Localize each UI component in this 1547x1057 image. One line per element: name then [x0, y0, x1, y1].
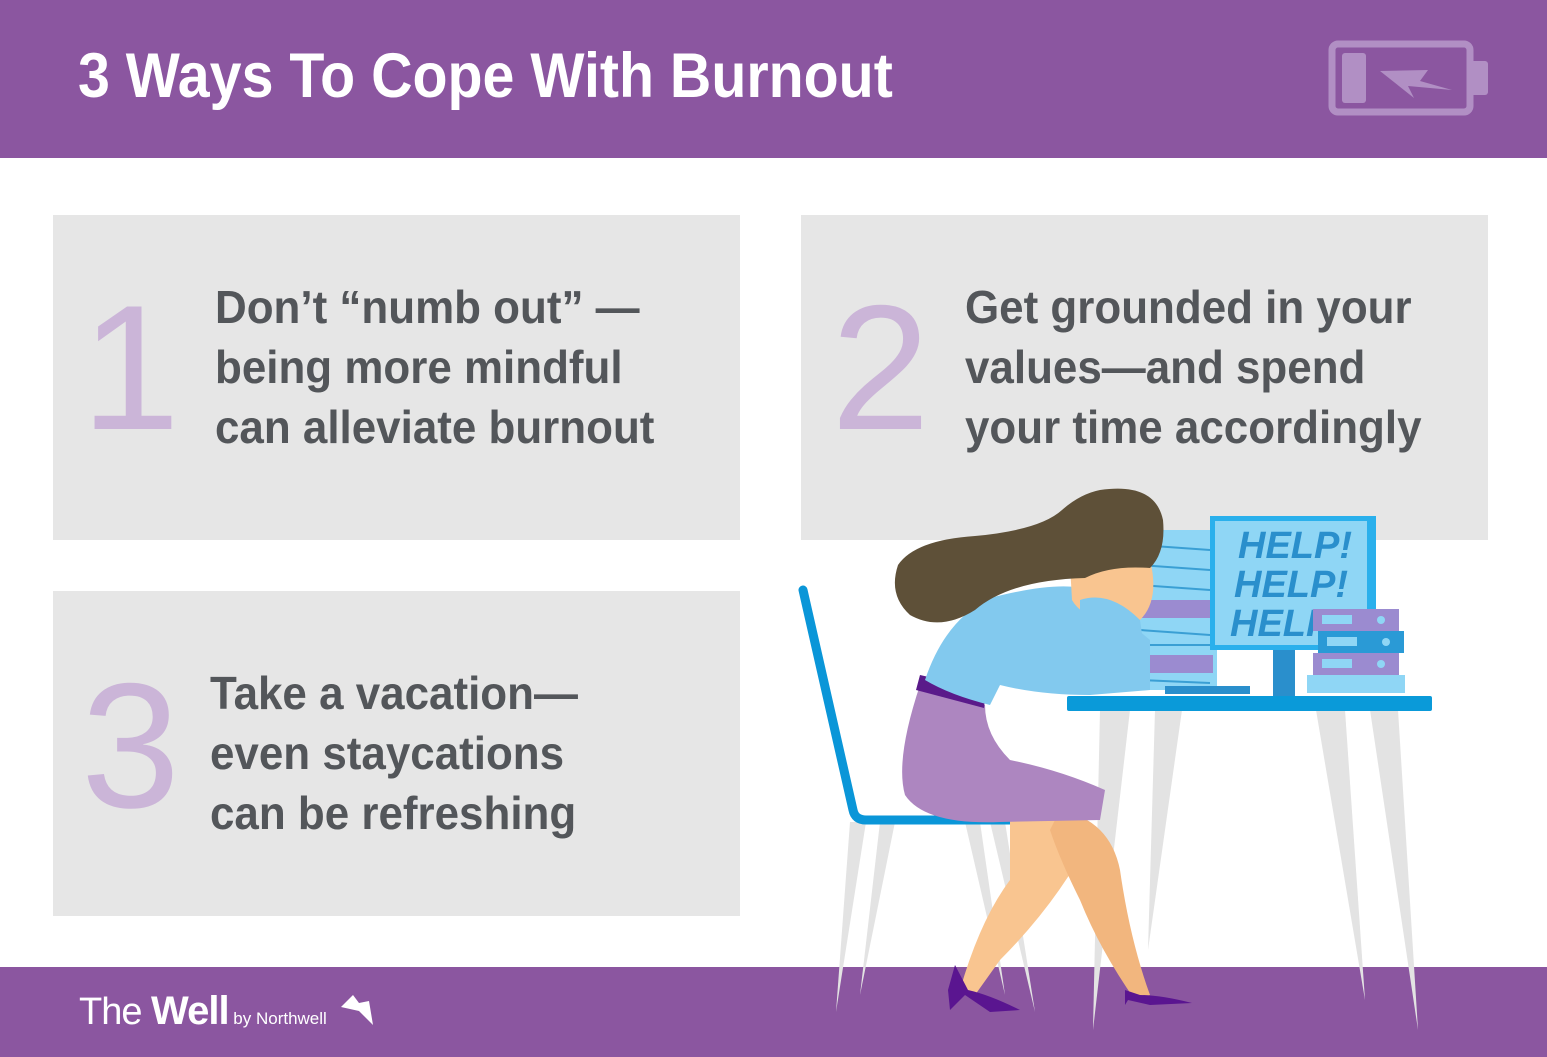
- monitor with HELP text: [1165, 516, 1376, 696]
- panel: step 1: [53, 215, 740, 540]
- monitor with HELP text: HELP!: [1238, 525, 1352, 567]
- number 1: 1: [81, 268, 180, 467]
- woman: [895, 489, 1192, 1012]
- text 2: Get grounded in your: [965, 281, 1412, 333]
- hair: [895, 489, 1163, 622]
- shirt: [925, 586, 1150, 705]
- binders right: [1307, 609, 1405, 693]
- text 2: [965, 281, 1422, 453]
- chair: [803, 590, 1035, 1012]
- text 3: can be refreshing: [210, 787, 576, 839]
- panel: step 3: [53, 591, 740, 916]
- panel: step 2: [801, 215, 1488, 540]
- text 2: your time accordingly: [965, 401, 1422, 453]
- number 2: 2: [831, 268, 930, 467]
- head / face: [1070, 554, 1153, 625]
- text 2: values—and spend: [965, 341, 1365, 393]
- monitor with HELP text: HELP!: [1234, 564, 1348, 606]
- text 1: [215, 281, 654, 453]
- text 1: Don’t “numb out” —: [215, 281, 640, 333]
- number 3: 3: [81, 646, 180, 845]
- logo: The Well by Northwell: The Well by Northwell: [79, 989, 327, 1033]
- text 3: even staycations: [210, 727, 564, 779]
- text 1: can alleviate burnout: [215, 401, 654, 453]
- paper stack and binders left: [1135, 530, 1217, 690]
- text 3: [210, 667, 578, 839]
- skirt: [902, 685, 1105, 822]
- header bar: [0, 0, 1547, 158]
- shoes: [948, 965, 1020, 1012]
- title: 3 Ways To Cope With Burnout: [78, 41, 893, 111]
- icon: battery: [1328, 40, 1488, 116]
- text 3: Take a vacation—: [210, 667, 578, 719]
- desk: [1067, 696, 1432, 1030]
- footer bar: [0, 967, 1547, 1057]
- arms: [1080, 598, 1150, 690]
- monitor with HELP text: HELP!: [1230, 603, 1344, 645]
- belt: [916, 675, 986, 708]
- text 1: being more mindful: [215, 341, 623, 393]
- legs: [960, 812, 1095, 995]
